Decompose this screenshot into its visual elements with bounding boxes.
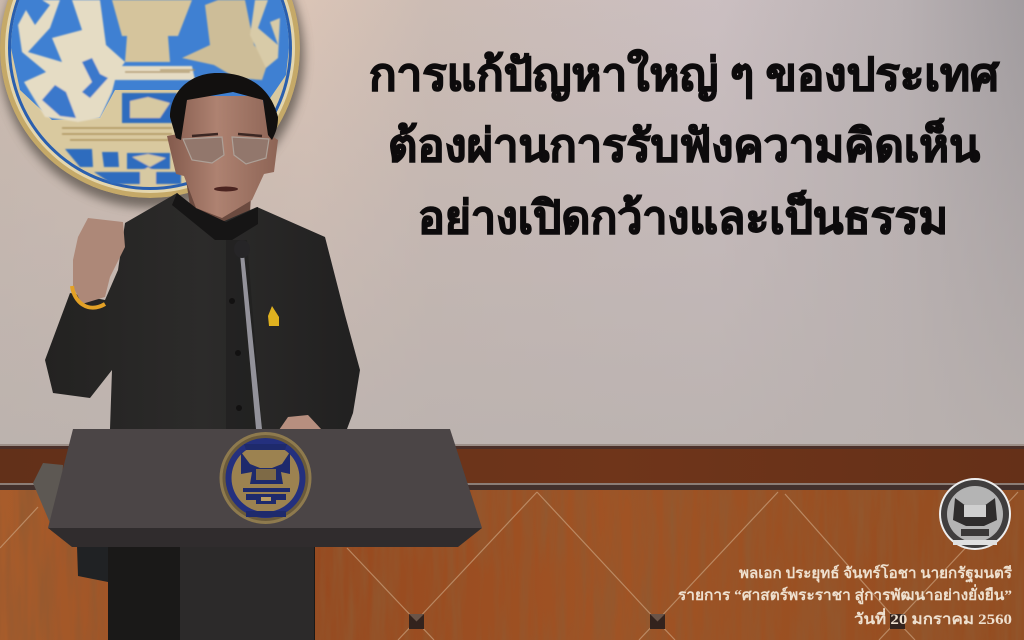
suit placket <box>226 240 262 429</box>
mouth <box>214 186 238 192</box>
caption line 2: รายการ “ศาสตร์พระราชา สู่การพัฒนาอย่างยั่งยืน” <box>678 584 1012 605</box>
caption line 1: พลเอก ประยุทธ์ จันทร์โอชา นายกรัฐมนตรี <box>739 563 1013 583</box>
podium seal <box>220 432 312 524</box>
title line 1: การแก้ปัญหาใหญ่ ๆ ของประเทศ <box>369 48 1000 101</box>
background: wood wainscot <box>0 444 1024 640</box>
head <box>167 96 278 218</box>
caption <box>678 563 1013 628</box>
seal ornament: left lion <box>18 0 195 122</box>
neck <box>186 180 252 226</box>
seal ornament: right figure <box>182 0 268 80</box>
title line 2: ต้องผ่านการรับฟังความคิดเห็น <box>388 118 980 171</box>
small seal logo <box>939 478 1011 550</box>
hair <box>170 73 278 140</box>
gold wristband <box>72 286 105 308</box>
title line 3: อย่างเปิดกว้างและเป็นธรรม <box>418 190 948 243</box>
background: wall <box>0 0 1024 446</box>
glasses <box>183 137 269 164</box>
trousers and podium column <box>77 545 315 640</box>
seal ornament: central panel <box>122 93 177 123</box>
seal ornament: lower panels <box>65 149 170 169</box>
podium <box>33 429 482 547</box>
microphone <box>234 240 262 429</box>
speaker <box>45 73 360 640</box>
large wall seal <box>0 0 304 208</box>
seal ornament: bowl on pedestal <box>112 0 192 62</box>
jacket buttons <box>229 298 242 411</box>
eyebrows <box>192 134 262 136</box>
gesturing hand <box>73 218 125 304</box>
title <box>369 48 1000 243</box>
caption line 3: วันที่ 20 มกราคม 2560 <box>854 608 1012 628</box>
collar <box>172 193 258 240</box>
suit jacket <box>45 193 360 429</box>
resting hand <box>279 415 322 430</box>
gold pin <box>268 306 279 326</box>
